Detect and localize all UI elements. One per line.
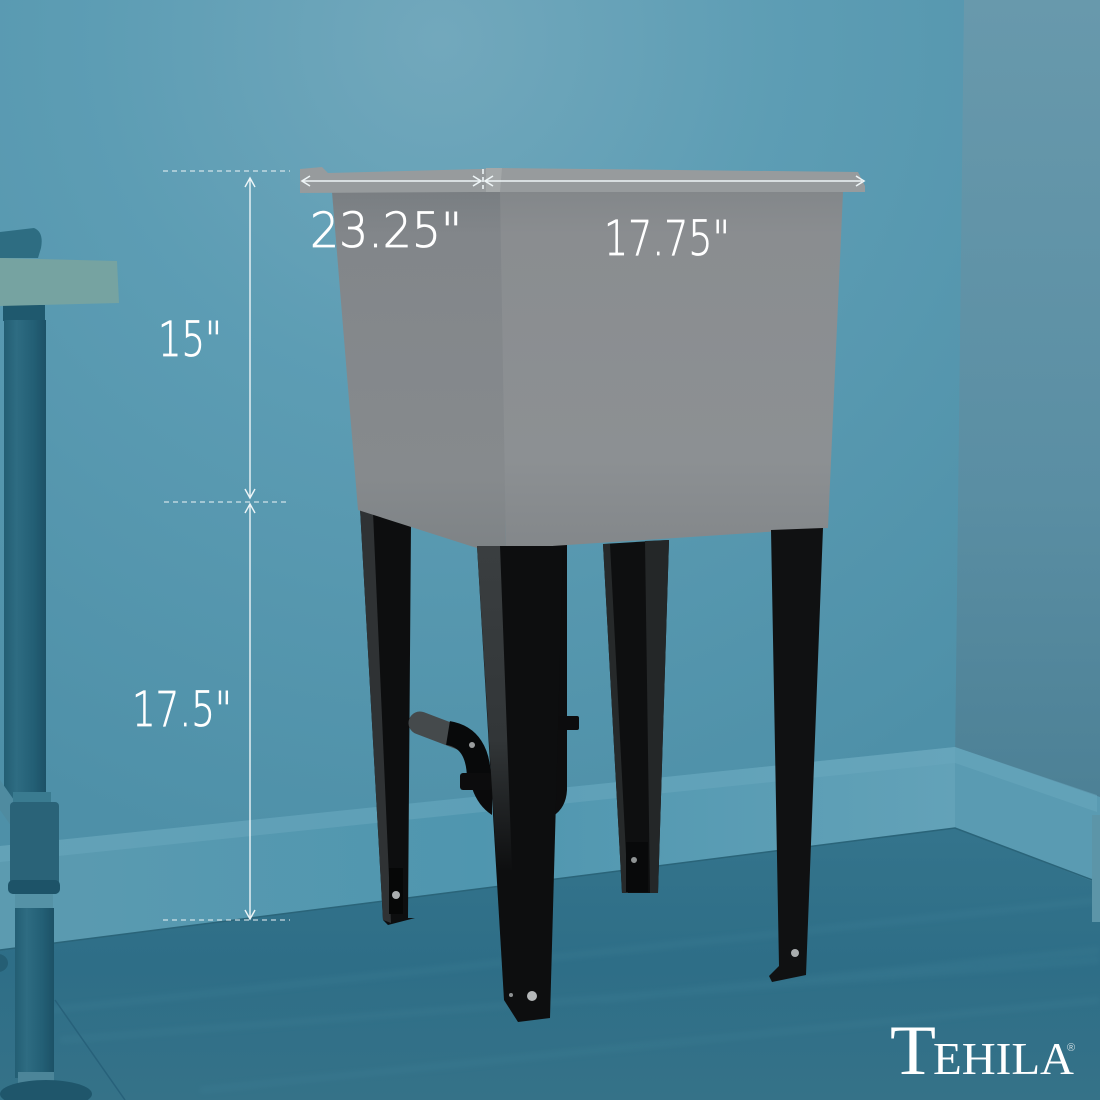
- sink tub: right face: [500, 192, 843, 549]
- dimension: height arrows: [163, 171, 290, 920]
- label: width 23.25: 23.25": [310, 203, 462, 259]
- label: tub height 15: 15": [158, 312, 222, 368]
- side wall pipe at right edge: [1092, 815, 1100, 922]
- logo: Tehila: EHILA: [933, 1033, 1074, 1084]
- leg: front left: [477, 546, 563, 1022]
- sink rim: [300, 167, 865, 193]
- cloth on table: [0, 228, 42, 258]
- table: wooden top: [0, 258, 119, 306]
- table: pipe leg: [0, 305, 92, 1100]
- baseboard: top cap band: [0, 747, 1097, 862]
- baseboard: side wall: [955, 747, 1100, 885]
- label: leg height 17.5: 17.5": [132, 682, 232, 738]
- floor: [0, 828, 1100, 1100]
- back wall: [0, 0, 966, 960]
- logo: Tehila: ®: [1067, 1042, 1075, 1054]
- label: depth 17.75: 17.75": [604, 211, 730, 267]
- leg: back right: [603, 540, 669, 893]
- right side wall: [955, 0, 1100, 900]
- logo: Tehila: [890, 1012, 1075, 1090]
- baseboard: back wall: [0, 747, 955, 950]
- sink tub: left face: [332, 192, 506, 549]
- logo: Tehila: T: [890, 1012, 936, 1090]
- leg: front right: [769, 528, 823, 982]
- drain pipe and trap: [420, 545, 579, 816]
- dimension: rim arrows: [302, 169, 864, 189]
- leg: back left: [360, 508, 415, 925]
